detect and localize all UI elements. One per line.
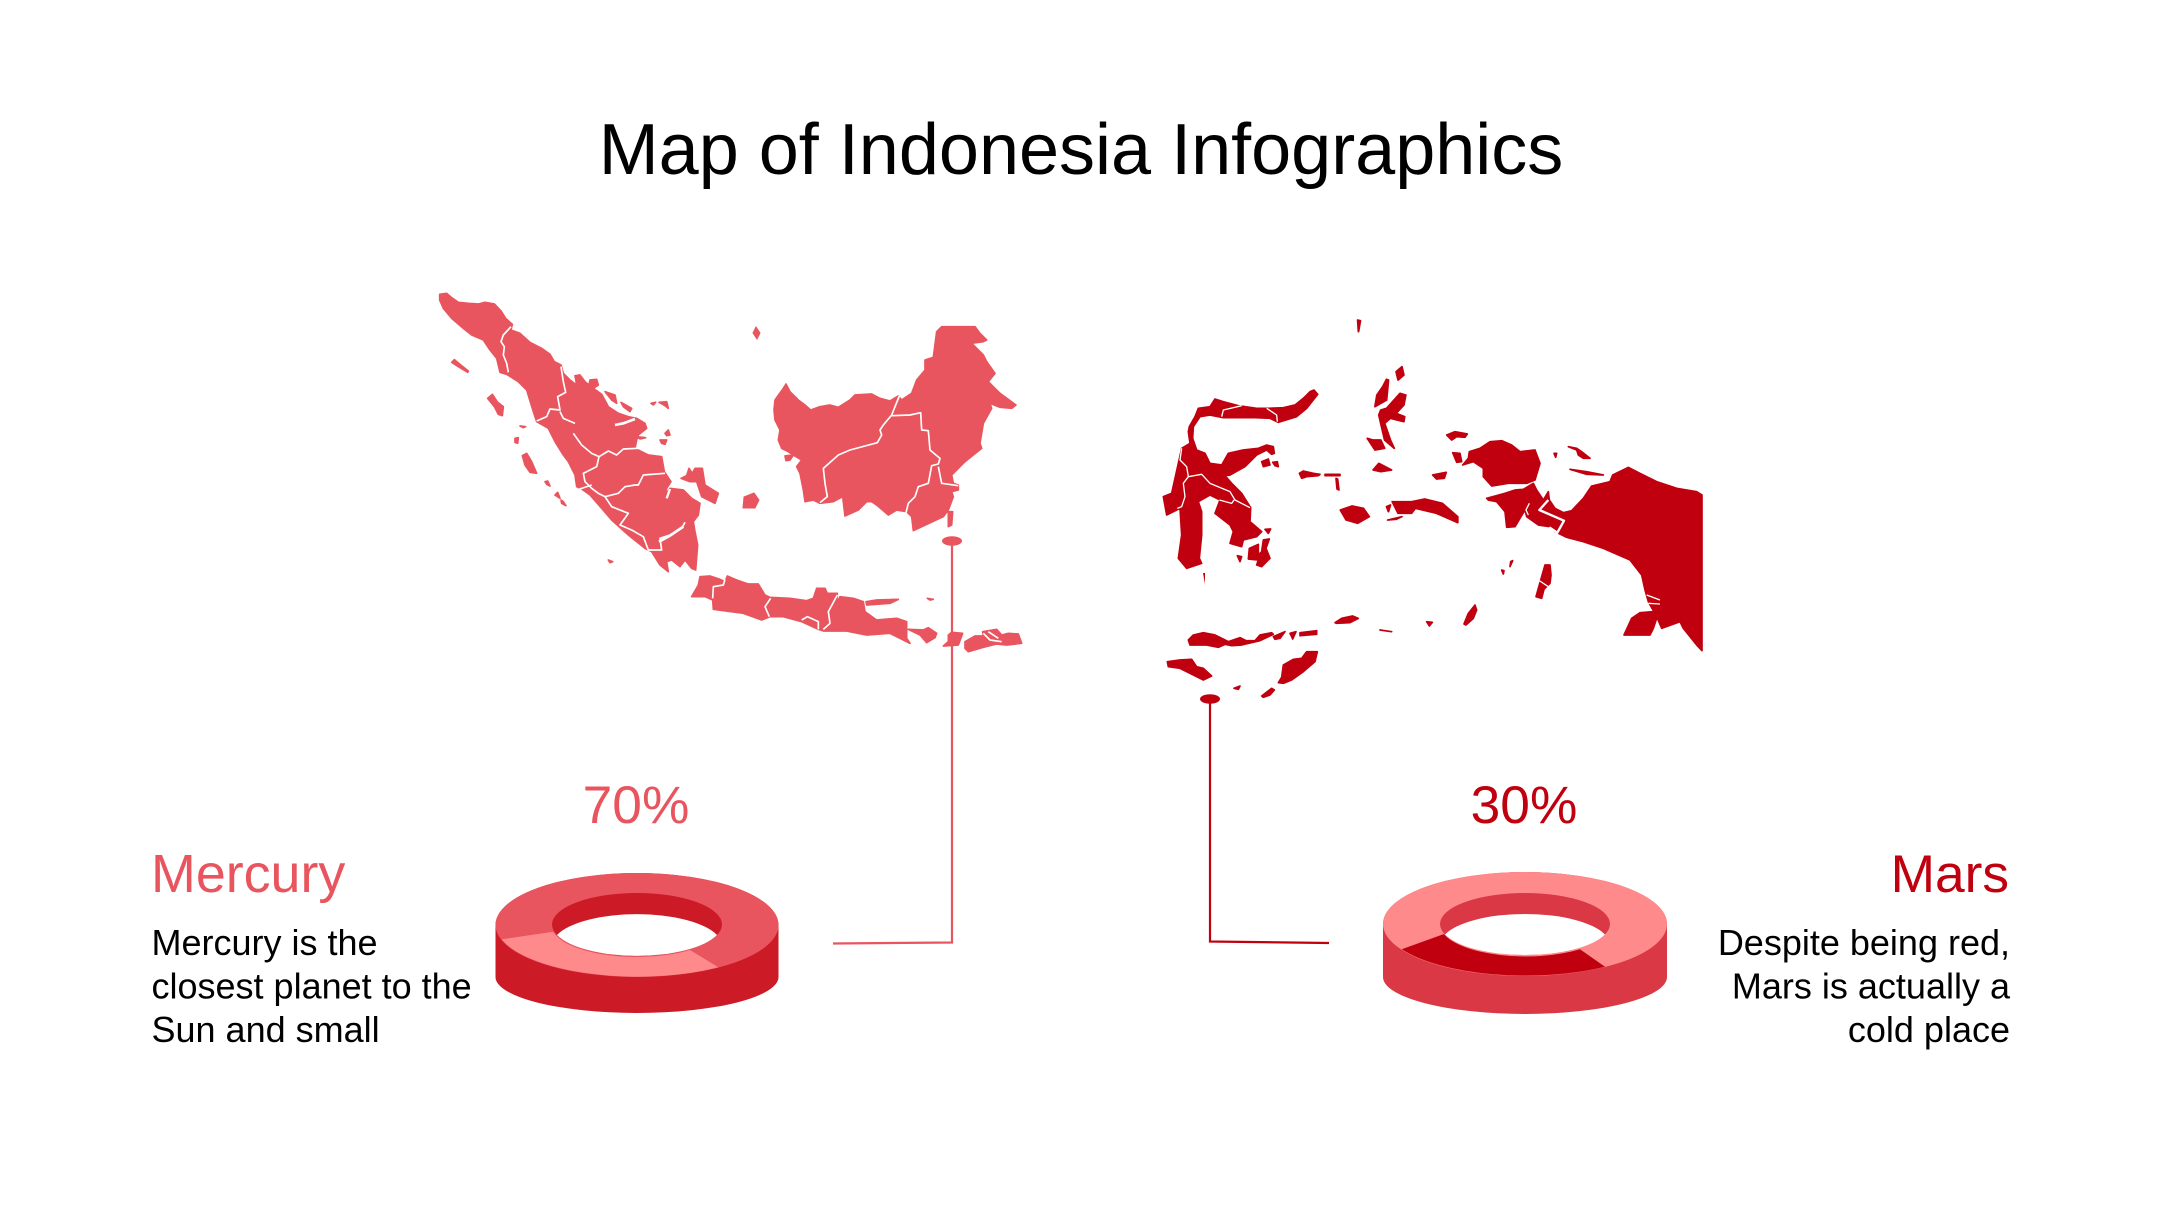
percentage: 30%: 30% bbox=[1471, 776, 1577, 835]
text block: Mercury: Mercury bbox=[151, 844, 345, 904]
donut: Mars 30% bbox=[1383, 872, 1667, 1014]
map: western Indonesia bbox=[440, 293, 1022, 652]
title: Map of Indonesia Infographics bbox=[599, 110, 1563, 190]
percentage: 70%: 70% bbox=[583, 776, 689, 835]
text block: Mars: cold place bbox=[1848, 1009, 2010, 1050]
Papua bbox=[1447, 432, 1702, 651]
Natuna and Belitung islands bbox=[743, 327, 760, 508]
Kalimantan bbox=[774, 327, 1016, 531]
Sulawesi bbox=[1163, 390, 1340, 568]
text block: Mars: Mars bbox=[1891, 845, 2009, 904]
Maluku islands bbox=[1340, 320, 1458, 523]
text block: Mercury bbox=[151, 844, 472, 1050]
connector: Mercury bbox=[833, 536, 962, 944]
text block: Mars: Despite being red, bbox=[1718, 922, 2010, 963]
connector: Mars bbox=[1200, 694, 1329, 943]
Selayar island bbox=[1203, 573, 1205, 584]
text block: Mercury: Sun and small bbox=[152, 1009, 380, 1050]
Lesser Sunda islands bbox=[1167, 605, 1477, 697]
text block: Mars bbox=[1718, 845, 2011, 1050]
Sumatra bbox=[440, 293, 718, 572]
text block: Mars: Mars is actually a bbox=[1732, 966, 2011, 1006]
Java, Bali and Lombok bbox=[692, 576, 1022, 652]
donut: Mercury 70% bbox=[496, 873, 778, 1013]
text block: Mercury: closest planet to the bbox=[152, 966, 472, 1006]
text block: Mercury: Mercury is the bbox=[152, 922, 378, 963]
map: eastern Indonesia bbox=[1163, 320, 1702, 697]
